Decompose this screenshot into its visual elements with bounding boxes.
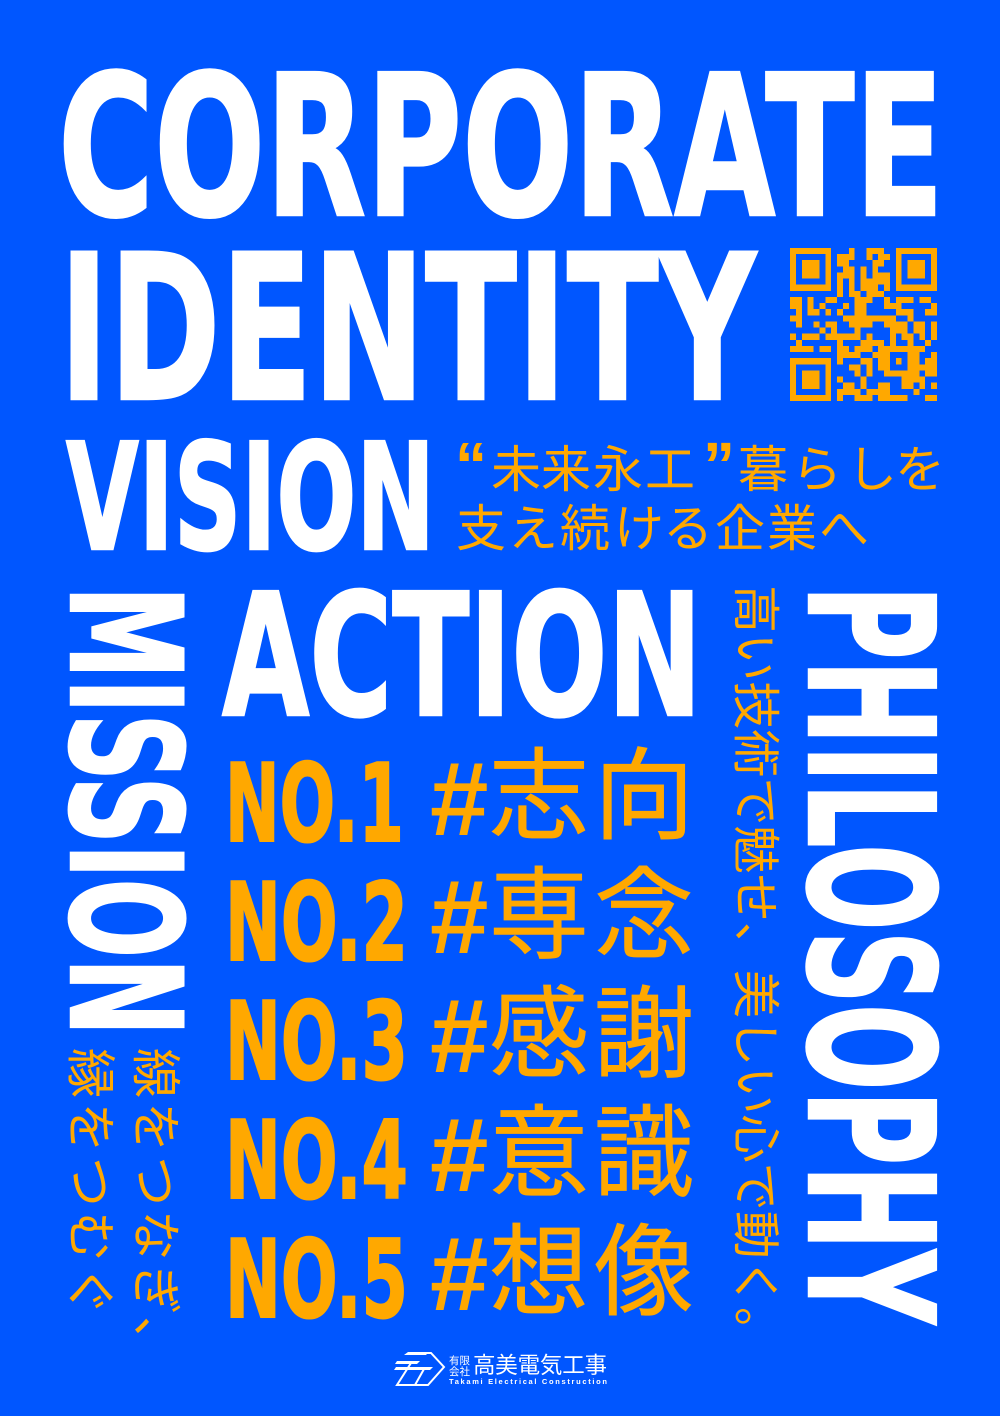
action list <box>225 741 694 1343</box>
company name: 高美電気工事 <box>473 1353 607 1378</box>
item 3 <box>225 978 694 1105</box>
company type: 有限 <box>449 1354 470 1367</box>
vision statement: 未来永工 <box>491 442 695 498</box>
item 5: 想像 <box>489 1217 694 1329</box>
item 4: NO.4 <box>225 1099 408 1224</box>
item 3: # <box>430 978 488 1095</box>
item 1: # <box>430 741 488 858</box>
company name in English: Takami Electrical Construction <box>449 1377 607 1386</box>
vision statement <box>455 429 945 557</box>
item 4 <box>225 1097 694 1224</box>
icon: QR code <box>790 251 937 398</box>
item 2 <box>225 859 694 986</box>
vision statement: ” <box>703 429 735 501</box>
item 2: NO.2 <box>225 861 408 986</box>
item 2: # <box>430 859 488 976</box>
item 5: # <box>430 1216 488 1333</box>
item 5 <box>225 1216 694 1343</box>
heading: VISION: VISION <box>66 412 435 584</box>
heading: ACTION: ACTION <box>222 558 702 756</box>
item 4: 意識 <box>489 1098 694 1210</box>
item 1: 志向 <box>489 741 694 853</box>
vision statement: 支え続ける企業へ <box>456 501 869 557</box>
mission statement (rotated): 線をつなぎ、 <box>127 1048 183 1366</box>
icon: company mark <box>394 1352 444 1385</box>
item 4: # <box>430 1097 488 1214</box>
vision statement: “ <box>455 429 487 501</box>
mission statement (rotated): 縁をつむぐ <box>62 1048 118 1316</box>
item 3: NO.3 <box>225 980 408 1105</box>
philosophy statement (rotated): 高い技術で魅せ、美しい心で動く。 <box>728 585 781 1355</box>
item 1: NO.1 <box>225 742 404 867</box>
company type <box>449 1354 470 1378</box>
item 2: 専念 <box>489 860 694 972</box>
company type: 会社 <box>449 1365 470 1378</box>
item 1 <box>225 741 694 867</box>
logo <box>394 1352 607 1386</box>
item 5: NO.5 <box>225 1218 408 1343</box>
mission statement (rotated) <box>62 1048 183 1366</box>
heading: MISSION (rotated): MISSION <box>34 586 213 1036</box>
vision statement: 暮らしを <box>738 442 945 498</box>
item 3: 感謝 <box>489 979 694 1091</box>
